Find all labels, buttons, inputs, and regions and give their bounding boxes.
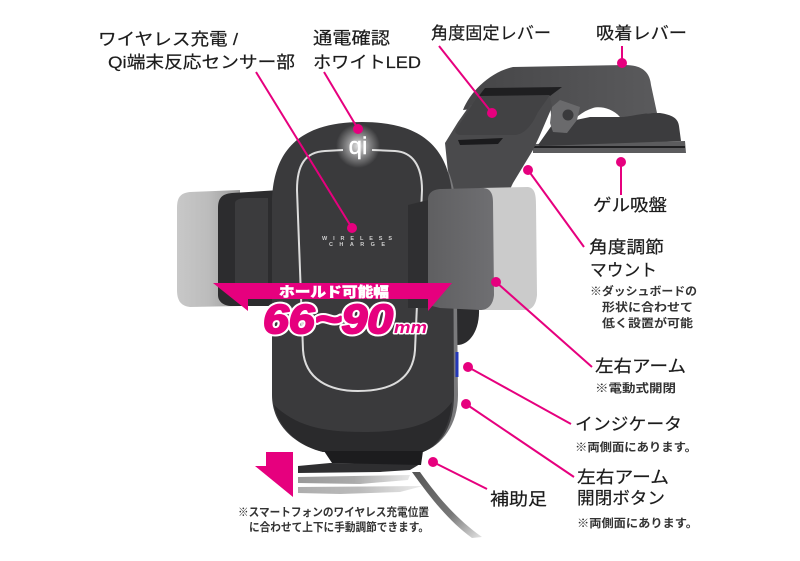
label: indicator <box>575 415 697 454</box>
hold width value: 66~90 <box>263 296 393 342</box>
label: wireless charging sensor: ワイヤレス充電 / <box>98 30 238 49</box>
arm slot <box>458 138 503 145</box>
label: suction lever: 吸着レバー <box>596 24 687 43</box>
label: indicator: ※両側面にあります。 <box>575 441 697 454</box>
label: angle adjustment mount: 形状に合わせて <box>602 300 693 314</box>
label: arm open close button: 左右アーム <box>577 468 669 487</box>
label: angle adjustment mount: ※ダッシュボードの <box>590 284 697 298</box>
ghost left arm <box>177 190 240 307</box>
body lower shading <box>274 402 452 452</box>
cable <box>412 472 482 538</box>
lever slot <box>478 87 562 97</box>
label: angle adjustment mount: 角度調節 <box>589 238 664 257</box>
leader lines <box>256 46 627 489</box>
stand foot <box>298 451 482 538</box>
downward adjustment arrow <box>255 452 293 497</box>
label: indicator: インジケータ <box>575 415 682 434</box>
adjustment arm <box>445 97 552 240</box>
note: manual height adjustment: に合わせて上下に手動調節できます。 <box>249 520 429 534</box>
label: wireless charging sensor: Qi端末反応センサー部 <box>108 53 295 72</box>
label: left and right arms <box>595 357 686 395</box>
label: angle adjustment mount: 低く設置が可能 <box>602 316 694 330</box>
banner label: ホールド可能幅 <box>279 284 389 300</box>
hold width value: mm <box>394 318 427 337</box>
label: auxiliary foot: 補助足 <box>490 490 547 509</box>
note: manual height adjustment: ※スマートフォンのワイヤレス充電位置 <box>238 505 429 519</box>
label: left and right arms: 左右アーム <box>595 357 686 376</box>
left arm dark clamp <box>218 190 280 306</box>
blue indicator <box>456 352 458 377</box>
wireless charge print: WIRELESS <box>322 236 392 242</box>
body edge highlight <box>415 170 458 452</box>
gel suction base <box>533 141 686 153</box>
Qi glow <box>336 124 380 168</box>
holder body <box>272 122 458 452</box>
ghost slats <box>298 475 410 484</box>
label: left and right arms: ※電動式開閉 <box>595 381 676 395</box>
hold width value: 66~90 <box>263 296 393 342</box>
label: arm open close button: 開閉ボタン <box>577 489 665 508</box>
label: gel suction: ゲル吸盤 <box>593 196 667 215</box>
suction lever arch <box>463 65 657 133</box>
Qi logo: qi <box>349 133 367 160</box>
label: white LED: ホワイトLED <box>313 53 421 72</box>
wireless charge print <box>322 236 392 248</box>
wireless charge print: CHARGE <box>329 242 385 248</box>
suction disc <box>538 113 681 146</box>
label: angle adjustment mount: マウント <box>590 261 657 280</box>
angle fixing lever <box>455 95 550 135</box>
right arm <box>408 188 494 310</box>
label: arm open close button <box>577 468 698 530</box>
label: white LED <box>313 29 421 72</box>
label: angle adjustment mount <box>589 238 697 330</box>
gel dark seam <box>533 146 685 148</box>
neck <box>324 451 423 465</box>
label: arm open close button: ※両側面にあります。 <box>577 517 698 530</box>
body shell <box>272 122 454 452</box>
label: white LED: 通電確認 <box>313 29 390 48</box>
label: angle fixing lever: 角度固定レバー <box>431 24 551 43</box>
note: manual height adjustment <box>238 505 429 534</box>
hinge bolt <box>562 110 574 120</box>
hold width banner <box>213 283 452 342</box>
ghost right arm <box>480 187 537 310</box>
slat dark <box>298 463 420 473</box>
suction mount <box>445 65 686 345</box>
banner shape <box>213 283 452 311</box>
white charging outline <box>297 150 422 391</box>
label: wireless charging sensor <box>98 30 295 72</box>
hinge <box>550 100 580 133</box>
lower arm piece <box>457 308 479 345</box>
